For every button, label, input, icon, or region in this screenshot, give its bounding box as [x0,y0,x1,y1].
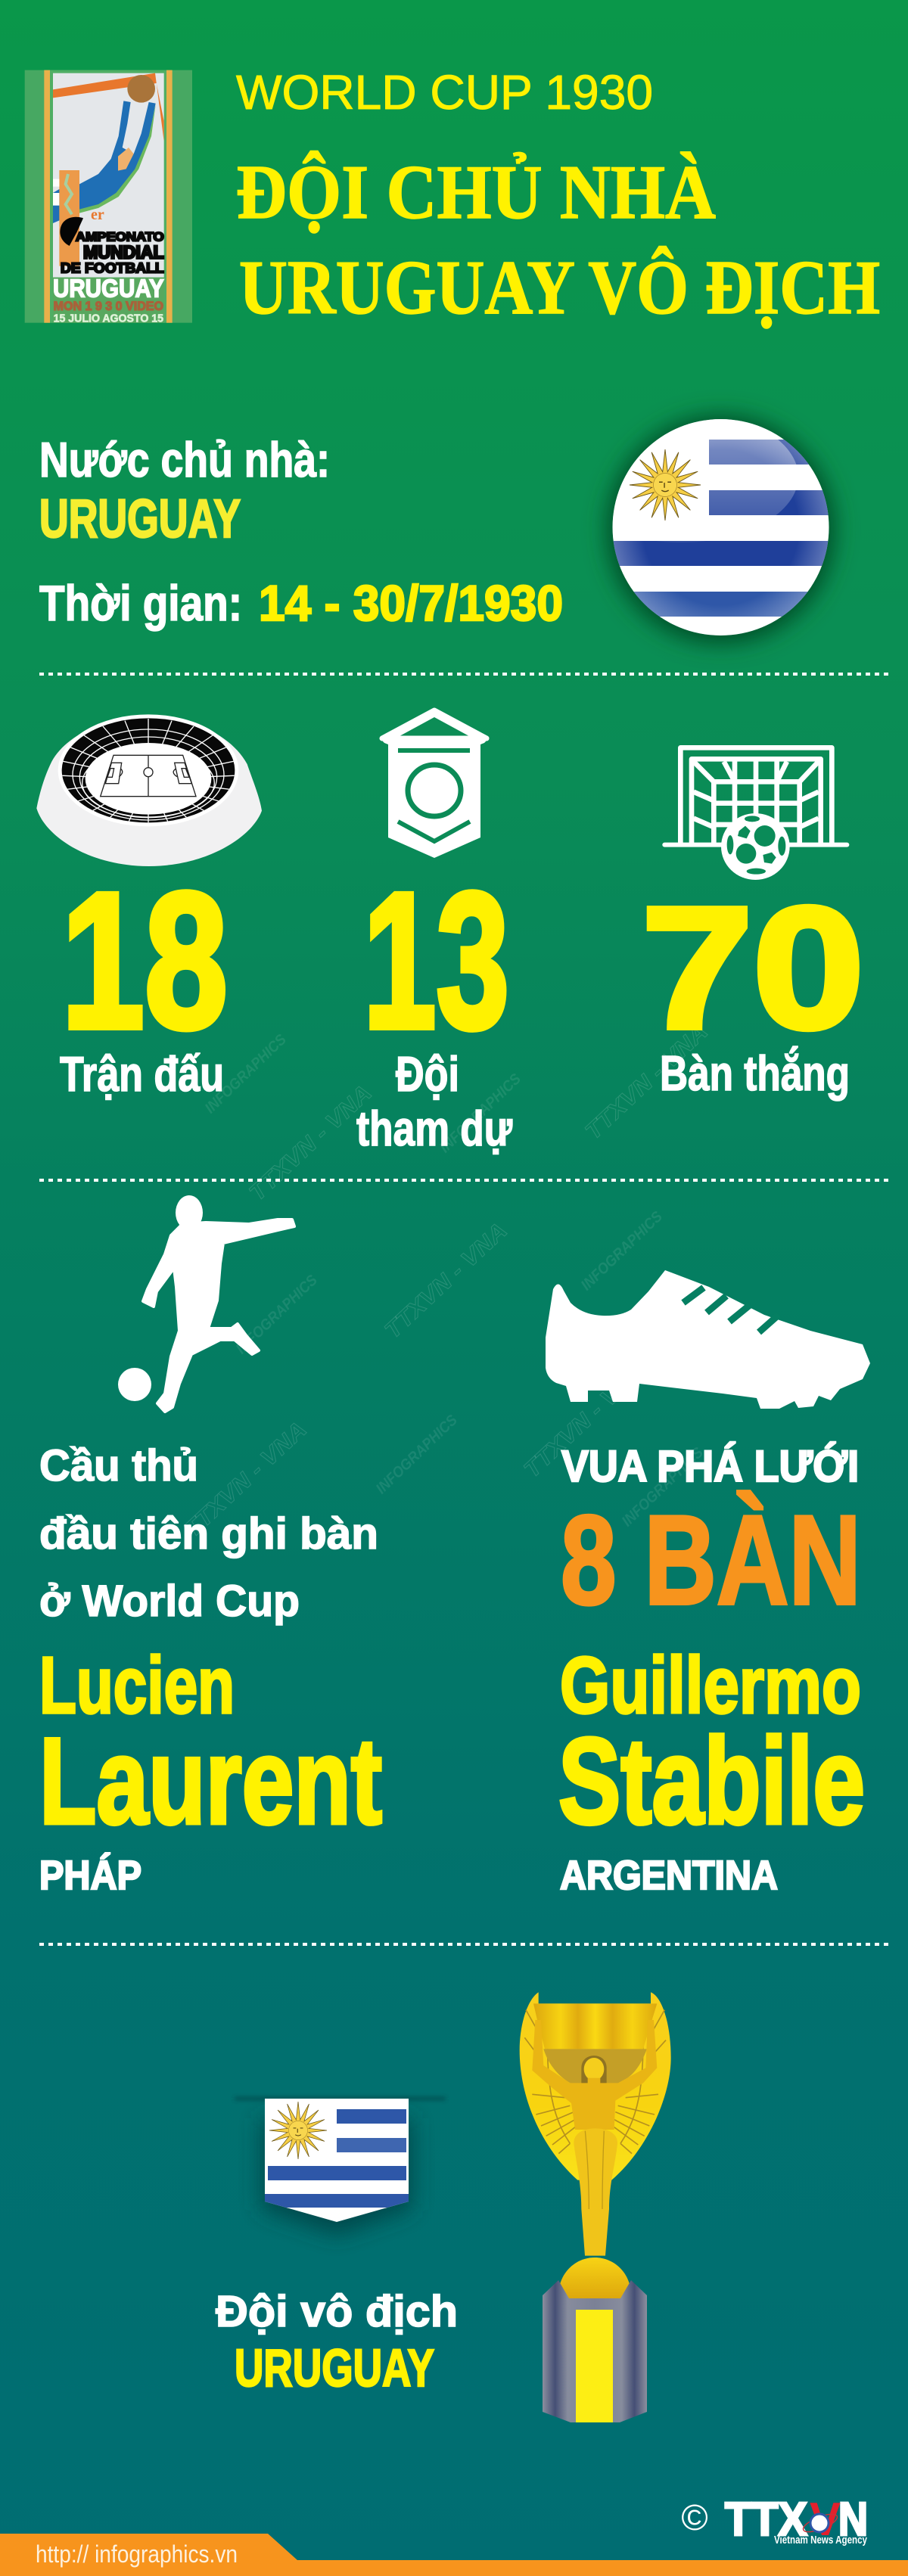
poster: World Cup 1930: MON 1 9 3 0 VIDEO [54,299,163,313]
divider [39,1179,889,1182]
watermarks: INFOGRAPHICS [619,1444,707,1530]
poster: World Cup 1930: AMPEONATO [76,229,164,244]
host name: URUGUAY [39,489,241,549]
agency name: Vietnam News Agency [774,2534,868,2546]
poster: World Cup 1930: er [91,207,104,223]
poster: World Cup 1930: MUNDIAL [83,243,164,263]
footer bar [0,2534,908,2576]
poster: World Cup 1930: URUGUAY [53,275,164,303]
champion name: URUGUAY [235,2338,434,2397]
panel: top scorer [546,1270,870,1898]
panel: first goal scorer [39,1195,382,1898]
watermarks: TTXVN - VNA [179,1417,312,1543]
poster: World Cup 1930 [25,70,192,325]
first name: Lucien [39,1641,235,1730]
label: Bàn thắng [660,1046,850,1101]
label: Trận đấu [60,1046,224,1102]
title kicker: WORLD CUP 1930 [236,65,653,120]
poster: World Cup 1930: 15 JULIO AGOSTO 15 [54,312,163,325]
country: PHÁP [39,1853,141,1898]
watermarks: TTXVN - VNA [519,1357,651,1483]
watermarks: TTXVN - VNA [380,1218,512,1344]
watermarks: TTXVN - VNA [244,1080,377,1206]
watermarks: INFOGRAPHICS [578,1208,666,1294]
country: ARGENTINA [560,1853,778,1898]
watermarks [179,1019,713,1543]
host country text [39,432,563,631]
icon: Jules Rimet trophy [520,1992,671,2422]
intro line 1: Cầu thủ [39,1441,198,1490]
poster: World Cup 1930: DE FOOTBALL [61,260,164,276]
number 70: 70 [642,872,864,1064]
logo letter V: V [810,2494,841,2546]
stat: goals [642,747,864,1101]
divider [39,673,889,676]
icon: player kicking ball [118,1195,294,1412]
title [236,65,880,331]
watermarks: INFOGRAPHICS [373,1412,461,1497]
last name: Laurent [39,1713,382,1850]
dates label: Thời gian: [39,575,242,631]
copyright mark: © [681,2498,708,2538]
icon: Uruguay shield flag [235,2097,446,2236]
label line 1: Đội [396,1046,459,1102]
dates value: 14 - 30/7/1930 [259,575,563,631]
intro line 2: đầu tiên ghi bàn [39,1509,378,1558]
watermarks: TTXVN - VNA [580,1019,713,1145]
logo globe [801,2511,839,2535]
watermarks: INFOGRAPHICS [437,1070,524,1156]
footer url: http:// infographics.vn [36,2540,238,2568]
icon: pennant [381,710,487,858]
label line 2: tham dự [356,1101,513,1156]
divider [39,1943,889,1946]
watermarks: INFOGRAPHICS [233,1272,321,1357]
stat: teams [356,710,513,1156]
number 13: 13 [363,853,509,1069]
panel: champion [216,1992,671,2422]
icon: stadium [36,714,262,866]
host label: Nước chủ nhà: [39,432,330,487]
intro line 3: ở World Cup [39,1577,300,1626]
top scorer label: VUA PHÁ LƯỚI [561,1442,859,1491]
logo letter N: N [838,2494,868,2546]
watermarks: INFOGRAPHICS [202,1031,290,1117]
icon: football boot [546,1270,870,1409]
champion label: Đội vô địch [216,2287,458,2336]
icon: Uruguay round flag [564,411,840,645]
icon: goal and ball [664,747,847,880]
logo: TTXVN [681,2494,868,2546]
title line 1: ĐỘI CHỦ NHÀ [236,150,716,235]
logo letters TTX: TTX [725,2494,807,2546]
stat: matches [36,714,262,1102]
number 18: 18 [61,853,228,1069]
